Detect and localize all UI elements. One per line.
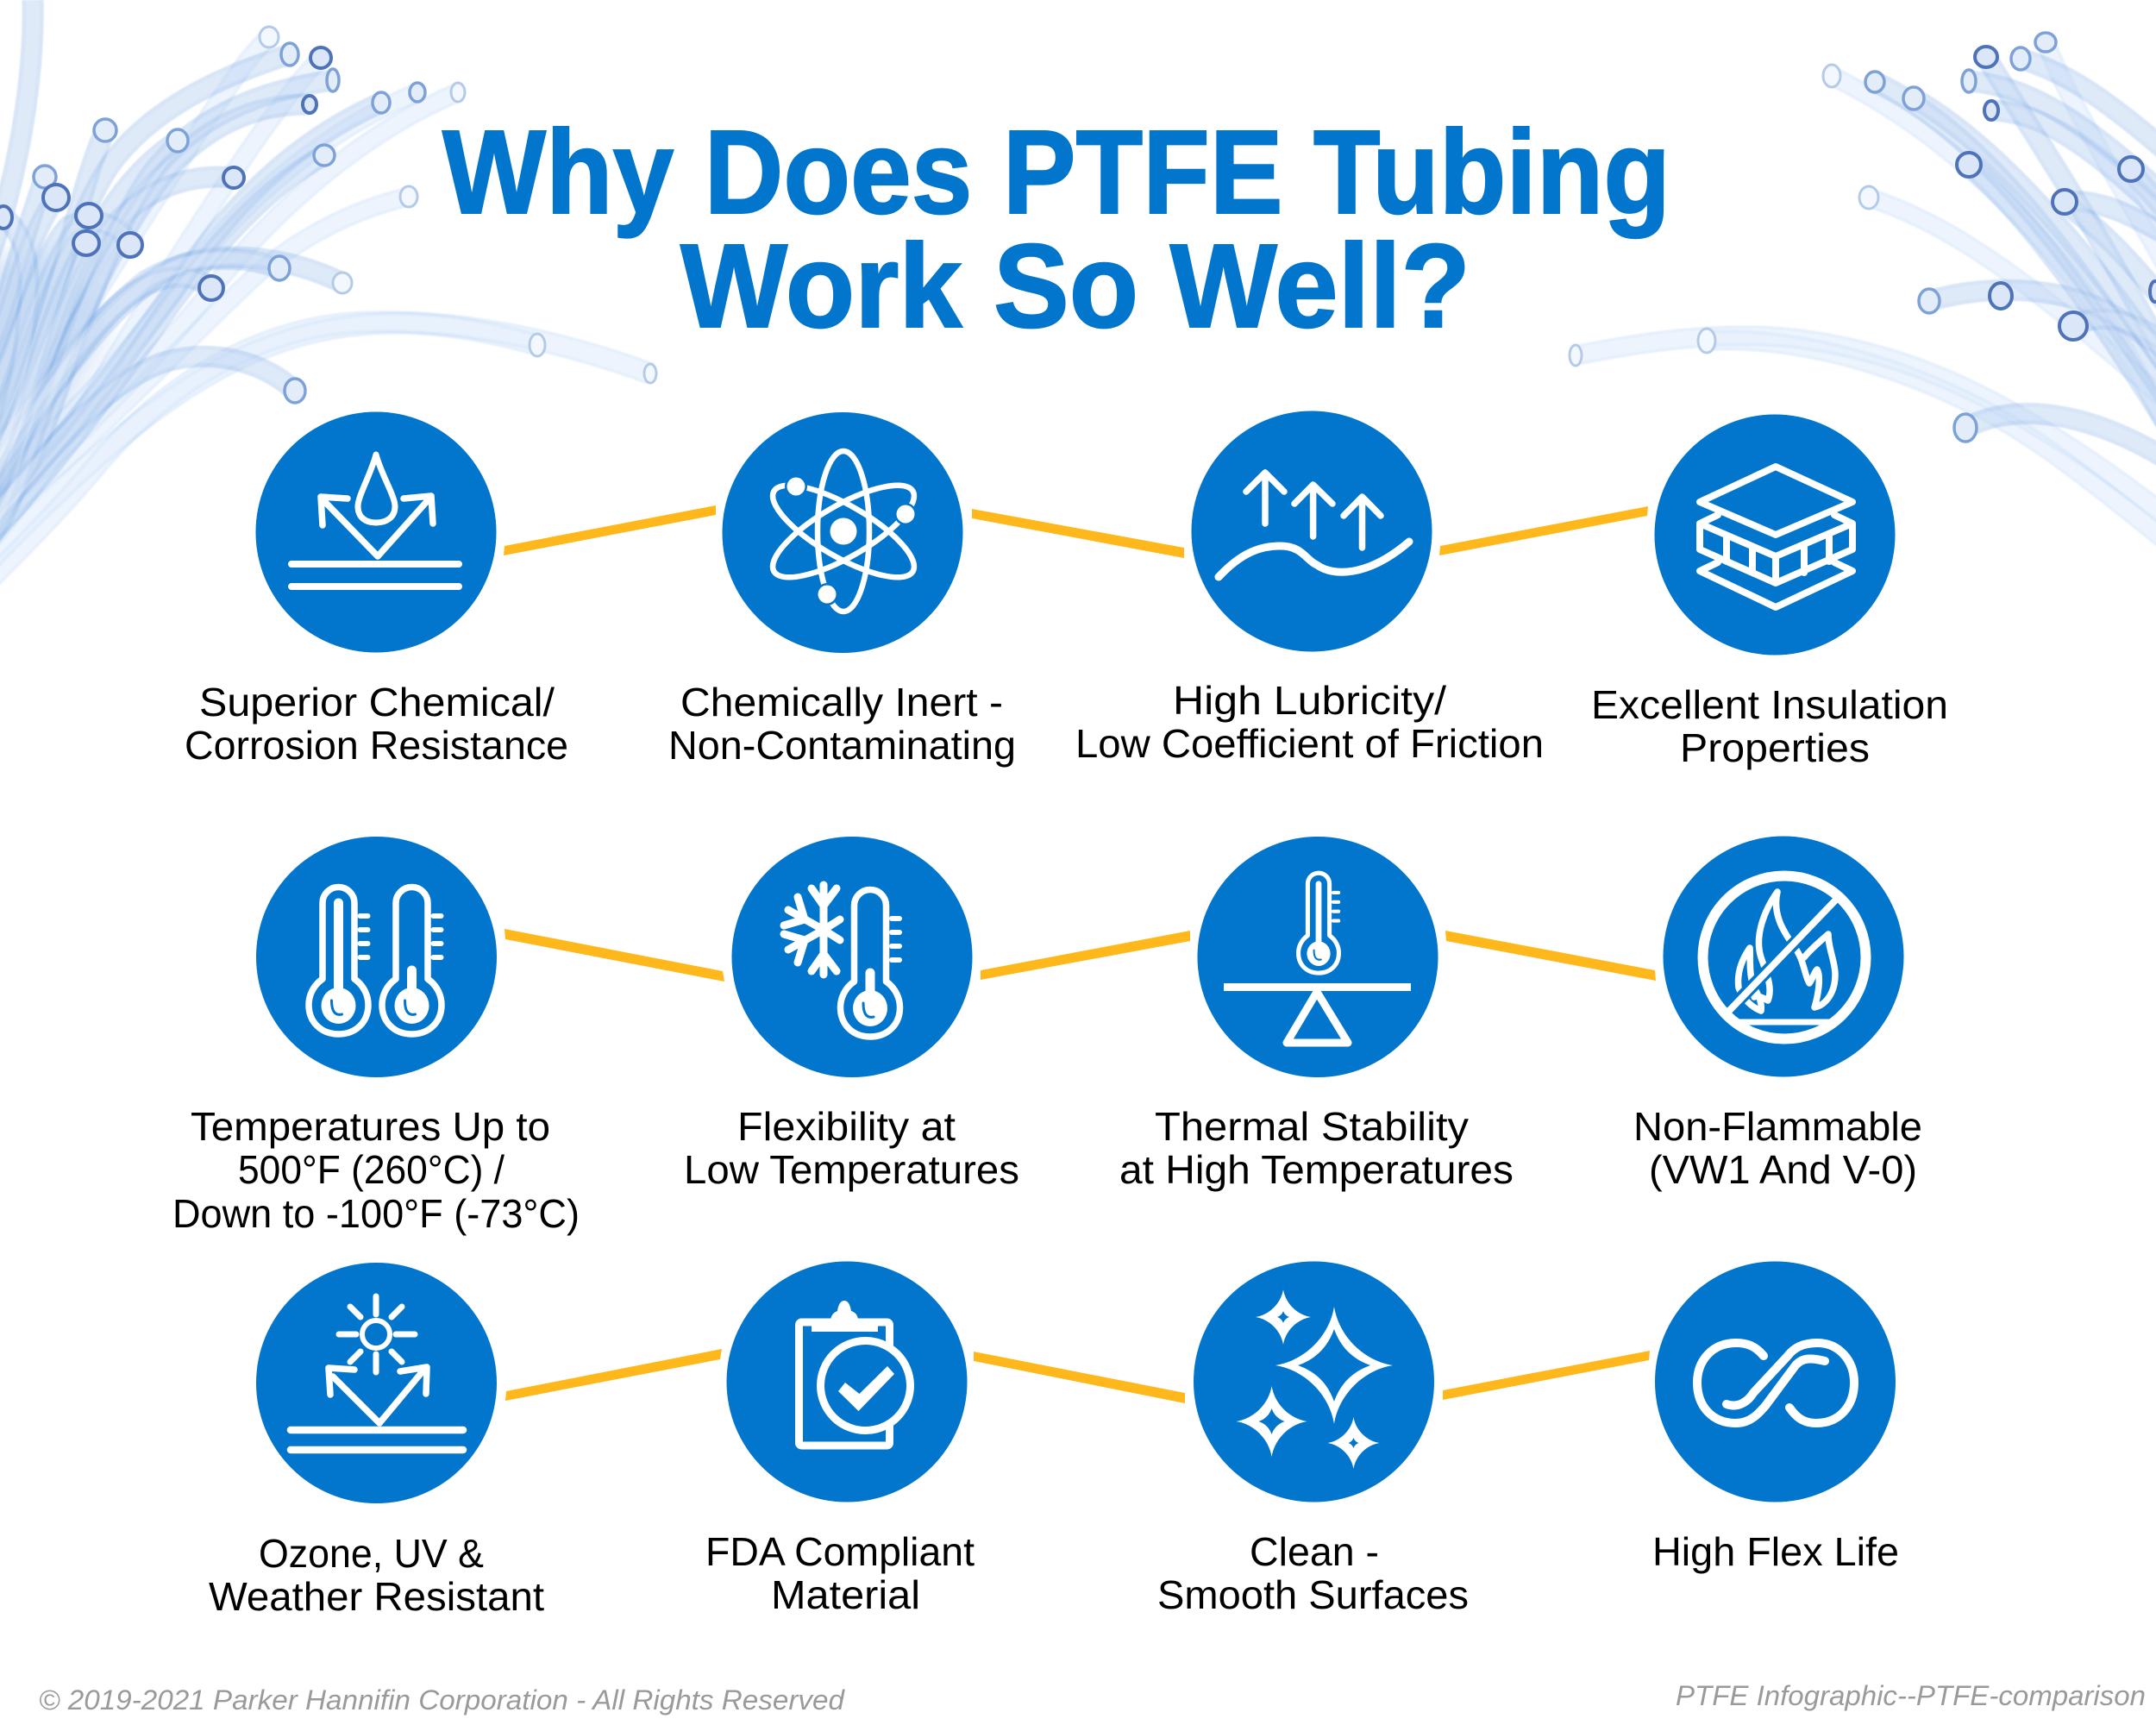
connector row 3: 2 to 3	[974, 1352, 1185, 1403]
icon: thermometer on balance	[1197, 837, 1438, 1077]
label: High Lubricity / Low Coefficient of Friction: Low Coefficient of Friction	[1075, 721, 1544, 766]
footer: copyright: © 2019-2021 Parker Hannifin Corporation - All Rights Reserved	[39, 1684, 845, 1716]
connector row 1: 3 to 4	[1439, 506, 1648, 555]
title	[442, 106, 1670, 353]
connector row 2: 2 to 3	[981, 931, 1190, 980]
decorative PTFE tubes: right	[1570, 33, 2156, 561]
connector row 3: 1 to 2	[505, 1349, 722, 1401]
label: Flexibility at Low Temperatures: Low Temperatures	[684, 1147, 1019, 1192]
icon: insulation layers	[1654, 414, 1896, 656]
label: High Lubricity / Low Coefficient of Friction: High Lubricity/	[1173, 678, 1446, 723]
icon: infinity flex	[1655, 1261, 1896, 1502]
title: Why Does PTFE Tubing	[442, 106, 1670, 239]
title: Work So Well?	[680, 220, 1470, 353]
label: Non-Flammable (VW1 And V-0): Non-Flammable	[1633, 1104, 1922, 1149]
label: Superior Chemical / Corrosion Resistance	[185, 680, 568, 768]
label: FDA Compliant Material: FDA Compliant	[705, 1529, 975, 1574]
label: Superior Chemical / Corrosion Resistance: Corrosion Resistance	[185, 723, 568, 768]
label: Ozone, UV & Weather Resistant: Ozone, UV &	[259, 1531, 484, 1576]
label: Thermal Stability at High Temperatures	[1119, 1104, 1514, 1192]
icon: lubricity arrows over wave	[1192, 411, 1432, 652]
label: Temperatures range: 500°F (260°C) /	[238, 1147, 505, 1192]
label: Excellent Insulation Properties	[1591, 682, 1948, 770]
label: Clean - Smooth Surfaces: Clean -	[1250, 1529, 1379, 1574]
label: Excellent Insulation Properties: Excellent Insulation	[1591, 682, 1948, 727]
icon: snowflake and thermometer	[731, 837, 973, 1077]
label: Ozone, UV & Weather Resistant	[209, 1531, 544, 1619]
label: Non-Flammable (VW1 And V-0)	[1633, 1104, 1922, 1192]
label: Chemically Inert - Non-Contaminating: Chemically Inert -	[680, 680, 1003, 724]
label: Flexibility at Low Temperatures	[684, 1104, 1019, 1192]
label: Clean - Smooth Surfaces	[1157, 1529, 1469, 1617]
icon: clipboard with check	[726, 1261, 968, 1502]
label: FDA Compliant Material: Material	[771, 1572, 920, 1617]
label: Chemically Inert - Non-Contaminating	[668, 680, 1016, 768]
label: Chemically Inert - Non-Contaminating: Non-Contaminating	[668, 723, 1016, 768]
label: Excellent Insulation Properties: Properties	[1680, 725, 1870, 770]
icon: no flame	[1663, 837, 1904, 1076]
label: Clean - Smooth Surfaces: Smooth Surfaces	[1157, 1572, 1469, 1617]
label: Ozone, UV & Weather Resistant: Weather Resistant	[209, 1574, 544, 1619]
label: Thermal Stability at High Temperatures: at High Temperatures	[1119, 1147, 1514, 1192]
label: Thermal Stability at High Temperatures: Thermal Stability	[1155, 1104, 1469, 1149]
label: FDA Compliant Material	[705, 1529, 975, 1617]
icon: chemical resistance droplet	[255, 412, 497, 652]
label: High Lubricity / Low Coefficient of Friction	[1075, 678, 1544, 766]
footer: document name: PTFE Infographic--PTFE-comparison	[1676, 1680, 2146, 1711]
connector row 2: 3 to 4	[1445, 931, 1656, 981]
label: Superior Chemical / Corrosion Resistance: Superior Chemical/	[199, 680, 555, 724]
connector row 1: 2 to 3	[972, 509, 1184, 558]
label: Flexibility at Low Temperatures: Flexibility at	[737, 1104, 956, 1149]
connector row 1: 1 to 2	[504, 505, 716, 555]
label: Temperatures range: Down to -100°F (-73°C)	[172, 1191, 580, 1236]
icon: sun reflected from surface	[256, 1263, 497, 1503]
icon: sparkles	[1194, 1261, 1434, 1502]
label: Temperatures range	[172, 1104, 580, 1236]
label: Temperatures range: Temperatures Up to	[191, 1104, 550, 1149]
connector row 2: 1 to 2	[505, 929, 724, 982]
label: Non-Flammable (VW1 And V-0): (VW1 And V-0)	[1649, 1147, 1917, 1192]
decorative PTFE tubes: left	[0, 0, 656, 604]
icon: atom	[723, 412, 962, 653]
connector row 3: 3 to 4	[1443, 1351, 1650, 1400]
label: High Flex Life: High Flex Life	[1652, 1529, 1899, 1574]
icon: two thermometers	[256, 837, 497, 1077]
